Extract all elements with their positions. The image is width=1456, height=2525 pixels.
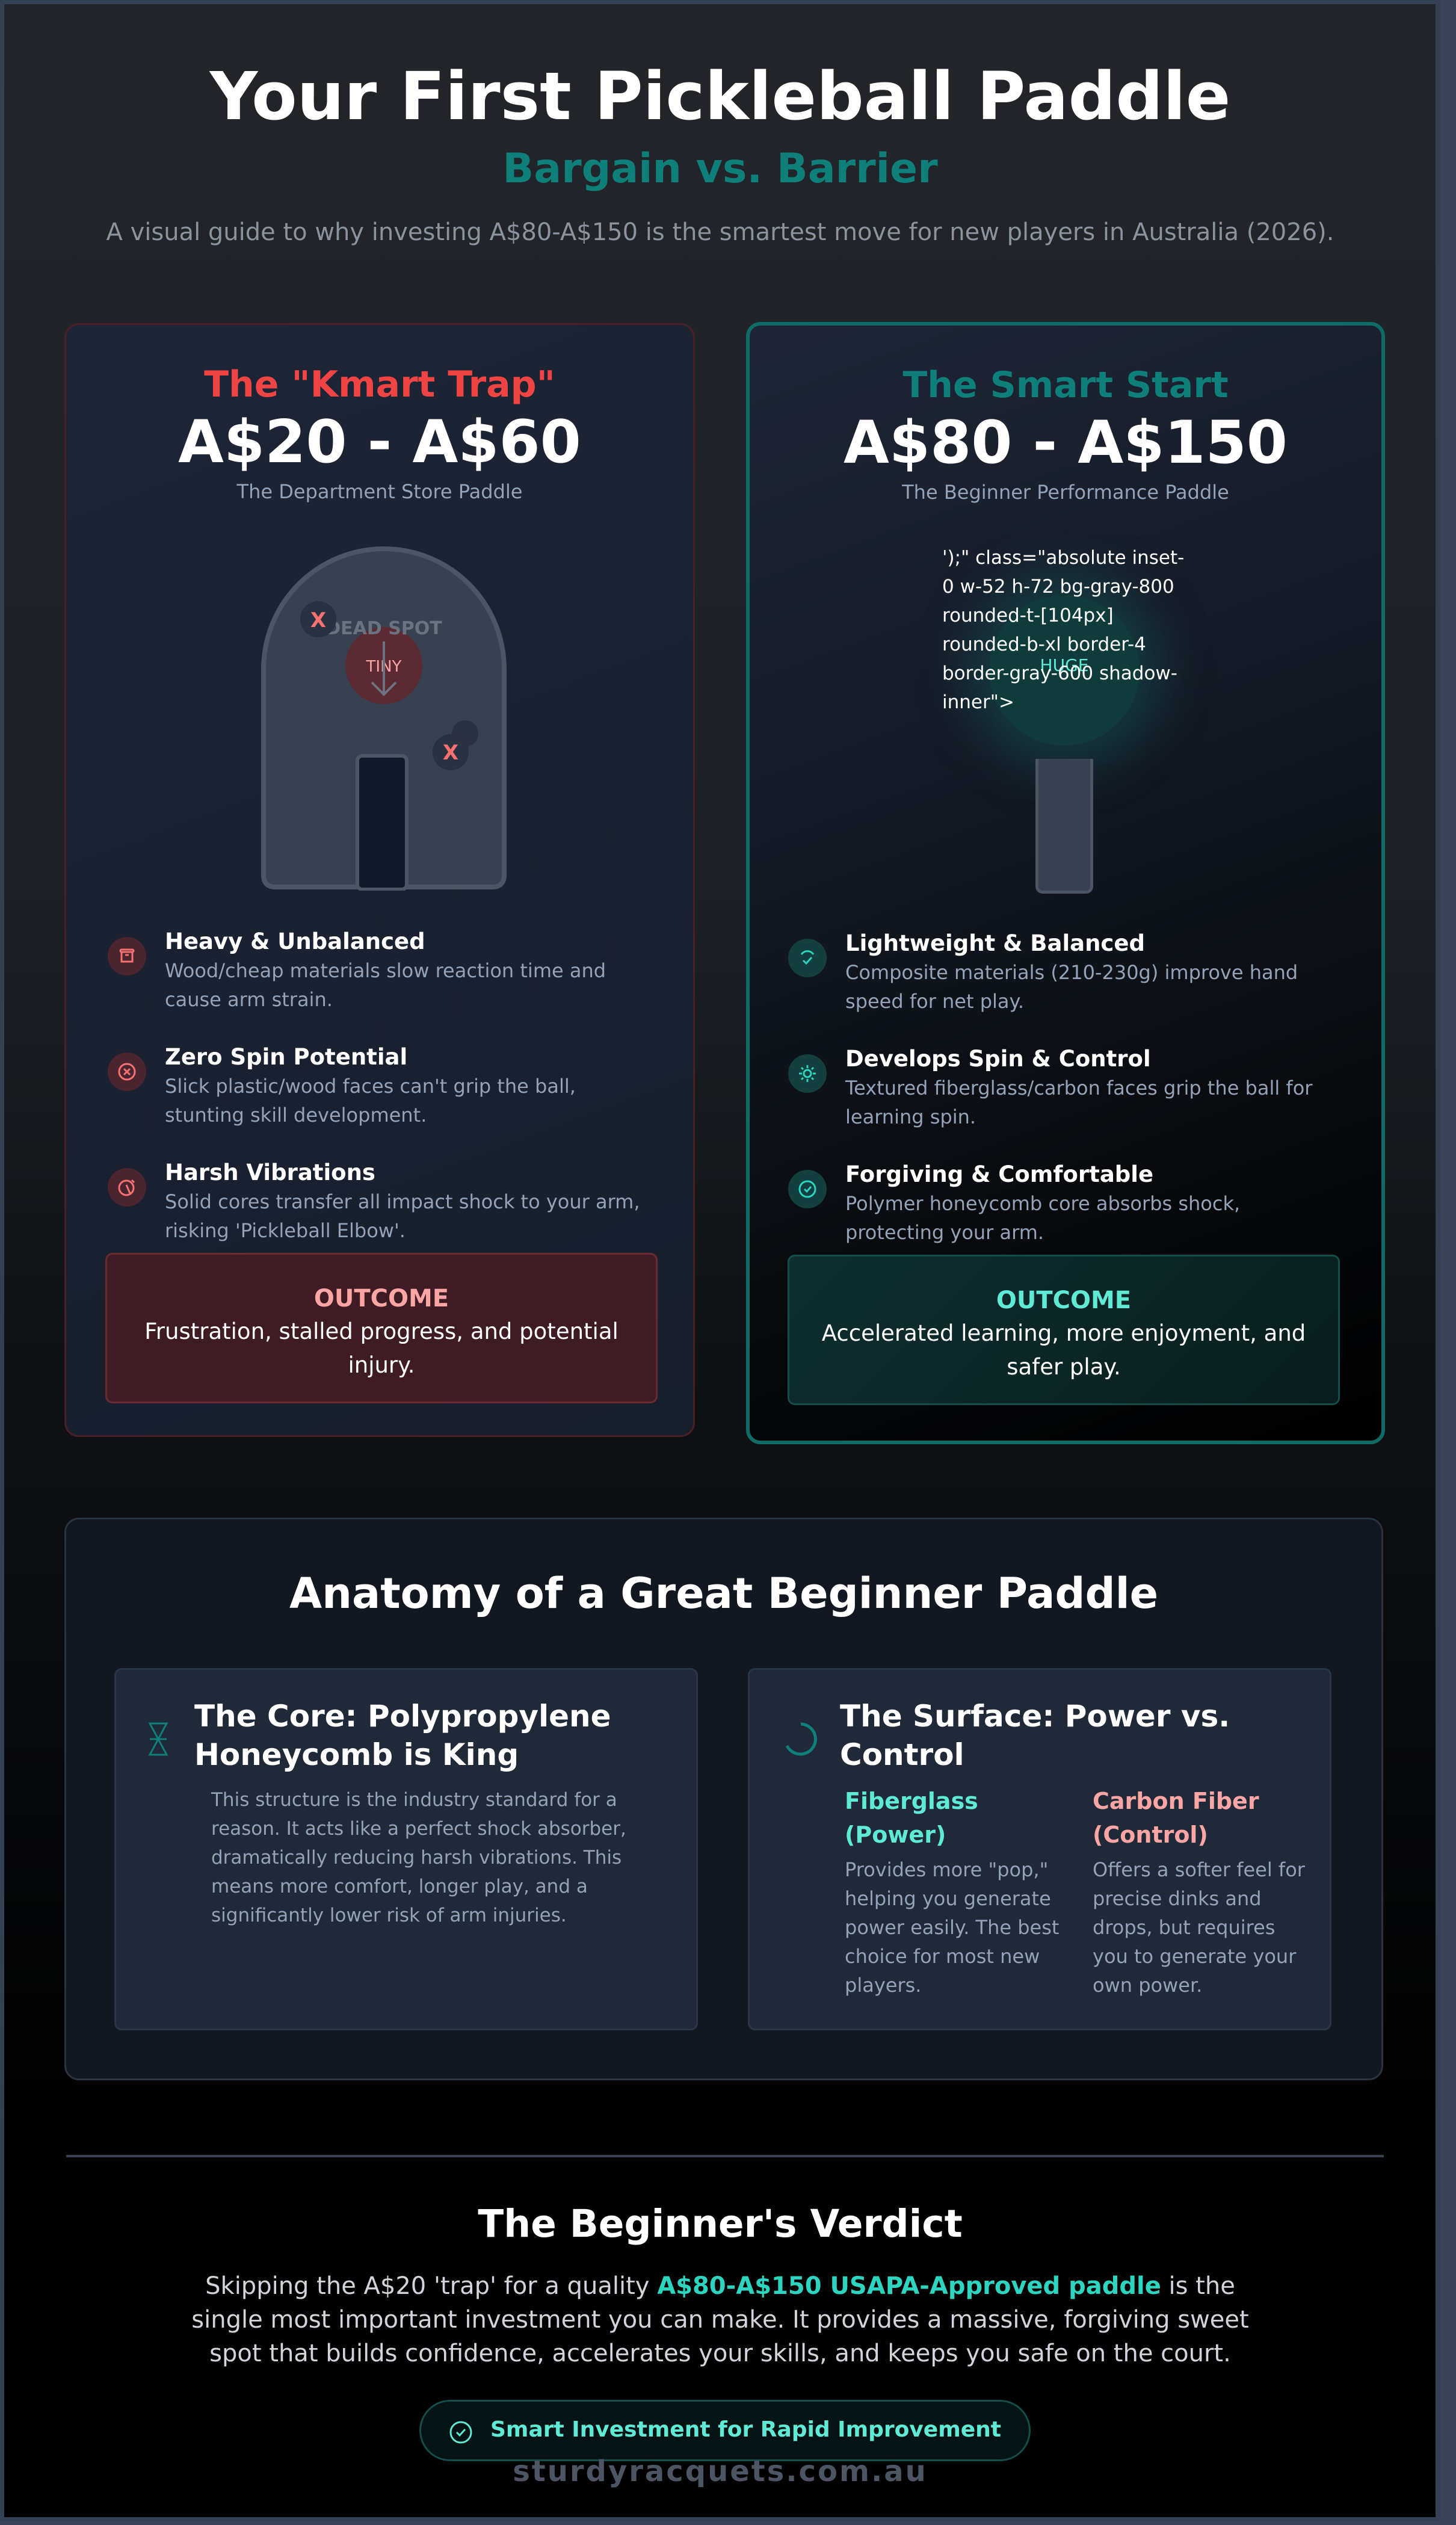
outcome: smart: Accelerated learning, more enjoyment, and safer play.	[822, 1320, 1306, 1380]
column: fiberglass	[845, 1788, 1059, 1997]
panel: smart start	[746, 322, 1385, 1444]
heading: anatomy: Anatomy of a Great Beginner Paddle	[289, 1569, 1158, 1618]
subtitle: Bargain vs. Barrier	[502, 145, 938, 193]
icon: x circle	[108, 1052, 146, 1091]
feature: zero spin	[108, 1044, 576, 1127]
icon: spinner	[786, 1722, 817, 1756]
outcome: smart	[788, 1255, 1340, 1405]
feature: forgiving	[788, 1161, 1240, 1244]
paddle illustration: cheap: X	[443, 741, 458, 765]
sub panel: surface	[748, 1668, 1331, 2030]
column: carbon: Carbon Fiber (Control)	[1093, 1788, 1259, 1848]
icon: balance	[788, 939, 827, 977]
outcome: kmart: OUTCOME	[314, 1285, 449, 1312]
feature: lightweight	[788, 930, 1298, 1013]
outcome: kmart: Frustration, stalled progress, and potential injury.	[144, 1318, 618, 1378]
column: fiberglass: Provides more "pop," helping you generate power easily. The best choice for most new players.	[845, 1858, 1059, 1997]
price: A$20 - A$60	[178, 408, 581, 477]
icon: sun	[788, 1054, 827, 1093]
feature: forgiving: Forgiving & Comfortable	[845, 1161, 1153, 1187]
feature: heavy	[108, 929, 606, 1011]
paddle illustration: cheap: DEAD SPOT	[325, 618, 442, 639]
panel: kmart trap	[64, 323, 695, 1437]
feature: heavy: Wood/cheap materials slow reaction time and cause arm strain.	[165, 959, 606, 1011]
paddle illustration: cheap: TINY	[366, 658, 402, 676]
icon: vibration	[108, 1168, 146, 1207]
column: carbon: Offers a softer feel for precise dinks and drops, but requires you to generate your own power.	[1093, 1858, 1305, 1997]
icon: check circle	[788, 1170, 827, 1208]
outcome: smart: OUTCOME	[996, 1287, 1131, 1314]
feature: harsh vibrations: Harsh Vibrations	[165, 1160, 375, 1185]
price subtitle: The Beginner Performance Paddle	[902, 481, 1229, 504]
price: A$80 - A$150	[844, 409, 1288, 477]
feature: spin	[788, 1046, 1313, 1128]
feature: spin: Textured fiberglass/carbon faces grip the ball for learning spin.	[845, 1077, 1312, 1128]
column: fiberglass: Fiberglass (Power)	[845, 1788, 978, 1848]
heading: smart start: The Smart Start	[902, 364, 1229, 406]
badge	[419, 2400, 1031, 2461]
heading: verdict: The Beginner's Verdict	[478, 2202, 963, 2246]
icon: check	[450, 2421, 472, 2443]
icon: box	[108, 937, 146, 975]
paddle illustration: cheap	[261, 546, 507, 891]
outcome: kmart	[105, 1253, 658, 1403]
feature: harsh vibrations	[108, 1160, 640, 1242]
panel: anatomy	[64, 1518, 1383, 2080]
feature: zero spin: Slick plastic/wood faces can't grip the ball, stunting skill development.	[165, 1075, 576, 1127]
footer: website: sturdyracquets.com.au	[513, 2455, 928, 2488]
badge: Smart Investment for Rapid Improvement	[490, 2417, 1001, 2442]
column: carbon	[1093, 1788, 1305, 1997]
feature: zero spin: Zero Spin Potential	[165, 1044, 407, 1070]
paddle illustration: performance	[942, 547, 1184, 894]
intro text: A visual guide to why investing A$80-A$150 is the smartest move for new players in Australia (2026).	[106, 218, 1334, 246]
heading: kmart trap: The "Kmart Trap"	[204, 363, 555, 406]
icon: honeycomb	[148, 1722, 168, 1756]
feature: forgiving: Polymer honeycomb core absorbs shock, protecting your arm.	[845, 1192, 1240, 1244]
feature: spin: Develops Spin & Control	[845, 1046, 1151, 1072]
feature: harsh vibrations: Solid cores transfer all impact shock to your arm, risking 'Pickleball Elbow'.	[165, 1190, 640, 1242]
heading: core: The Core: Polypropylene Honeycomb is King	[194, 1699, 611, 1772]
heading: surface: The Surface: Power vs. Control	[840, 1699, 1230, 1772]
text: core: This structure is the industry standard for a reason. It acts like a perfect shock absorber, dramatically reducing harsh vibrations. This means more comfort, longer play, and a significantly lower risk of arm injuries.	[211, 1789, 626, 1926]
paddle illustration: performance: HUGE	[1040, 655, 1088, 675]
feature: lightweight: Composite materials (210-230g) improve hand speed for net play.	[845, 961, 1298, 1013]
feature: lightweight: Lightweight & Balanced	[845, 930, 1145, 956]
price subtitle: The Department Store Paddle	[237, 480, 522, 503]
paddle illustration: performance: ');" class="absolute inset-0 w-52 h-72 bg-gray-800 rounded-t-[104px] rounded-b-xl border-4 border-gray-600 shadow-inner">	[942, 547, 1184, 713]
paddle illustration: cheap: X	[310, 608, 326, 632]
text: verdict: Skipping the A$20 'trap' for a quality A$80-A$150 USAPA-Approved paddle is the single most important investment you can make. It provides a massive, forgiving sweet spot that builds confidence, accelerates your skills, and keeps you safe on the court.	[191, 2272, 1249, 2367]
sub panel: core	[114, 1668, 698, 2030]
feature: heavy: Heavy & Unbalanced	[165, 929, 425, 954]
title: Your First Pickleball Paddle	[210, 58, 1230, 135]
